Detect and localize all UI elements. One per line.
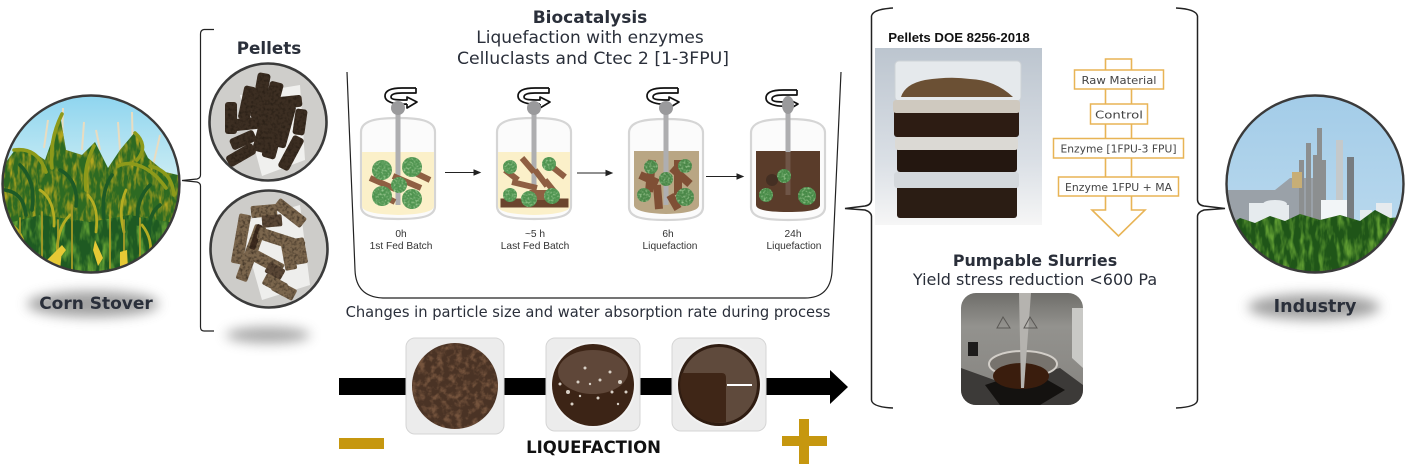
photo: light pellets	[210, 190, 328, 308]
label shadow	[1248, 294, 1380, 320]
panel: pellets	[210, 38, 328, 343]
caption: changes: Changes in particle size and water absorption rate during process	[346, 304, 830, 321]
photo: wet sample	[546, 338, 640, 431]
black arrow	[339, 370, 848, 404]
bracket: pellets	[182, 30, 214, 331]
photo: corn field	[0, 96, 185, 280]
box: raw material: Raw Material	[1082, 74, 1156, 87]
text: enzyme names: Celluclasts and Ctec 2 [1-3FPU]	[457, 49, 729, 69]
box: enzyme range	[1054, 138, 1184, 158]
arrow	[577, 170, 612, 176]
label: LIQUEFACTION: LIQUEFACTION	[526, 438, 661, 457]
panel: pumpable slurries	[912, 251, 1157, 405]
label: Corn Stover: Corn Stover	[39, 294, 153, 314]
reactor container outline	[347, 72, 841, 298]
reactor: 5h	[497, 88, 571, 219]
panel: industry	[1225, 96, 1407, 320]
reactor labels	[370, 229, 821, 252]
label: Industry: Industry	[1274, 297, 1357, 317]
reactor labels: 24h	[784, 229, 802, 240]
panel: liquefaction arrow	[339, 338, 848, 464]
heading: Pellets: Pellets	[237, 38, 301, 58]
reactor: 24h	[751, 90, 825, 220]
reactor labels: 6h	[662, 229, 674, 240]
heading: Biocatalysis: Biocatalysis	[533, 8, 647, 28]
panel: corn stover	[0, 96, 185, 317]
reactor labels: Liquefaction	[643, 241, 697, 252]
reactor labels: Last Fed Batch	[501, 241, 569, 252]
minus	[339, 438, 384, 449]
photo: solid sample	[406, 338, 504, 434]
box: raw material	[1074, 70, 1164, 89]
box: control	[1090, 104, 1148, 124]
photo: liquefied sample	[672, 338, 766, 431]
plus	[782, 419, 827, 464]
panel: biocatalysis	[346, 8, 841, 321]
text: enzymes: Liquefaction with enzymes	[476, 28, 704, 48]
arrow	[706, 174, 743, 179]
reactor: 0h	[361, 88, 435, 219]
label shadow	[27, 291, 159, 317]
photo: refinery	[1225, 96, 1407, 280]
reactor: 6h	[629, 88, 703, 220]
bracket: outputs left	[845, 8, 893, 408]
pellet shadow	[226, 327, 310, 343]
box: enzyme range: Enzyme [1FPU-3 FPU]	[1060, 142, 1176, 156]
reactor labels: 1st Fed Batch	[370, 241, 432, 252]
photo: stacked cups	[875, 48, 1042, 225]
panel: flow arrow	[1054, 59, 1184, 236]
box: control: Control	[1095, 108, 1143, 122]
heading: Pumpable Slurries: Pumpable Slurries	[953, 251, 1117, 270]
reactor labels: 0h	[395, 229, 407, 240]
photo: dark pellets	[210, 64, 326, 180]
photo: rheometer	[961, 293, 1083, 405]
hollow arrow	[1092, 59, 1145, 236]
panel: pellets DOE	[875, 30, 1042, 225]
reactor labels: ~5 h	[525, 229, 545, 240]
heading: Pellets DOE: Pellets DOE 8256-2018	[888, 30, 1030, 45]
bracket: outputs right	[1176, 8, 1225, 408]
text: yield stress: Yield stress reduction <600 Pa	[912, 270, 1157, 289]
box: enzyme MA	[1058, 177, 1178, 196]
arrow	[445, 170, 480, 175]
reactor labels: Liquefaction	[767, 241, 821, 252]
box: enzyme MA: Enzyme 1FPU + MA	[1065, 181, 1172, 194]
